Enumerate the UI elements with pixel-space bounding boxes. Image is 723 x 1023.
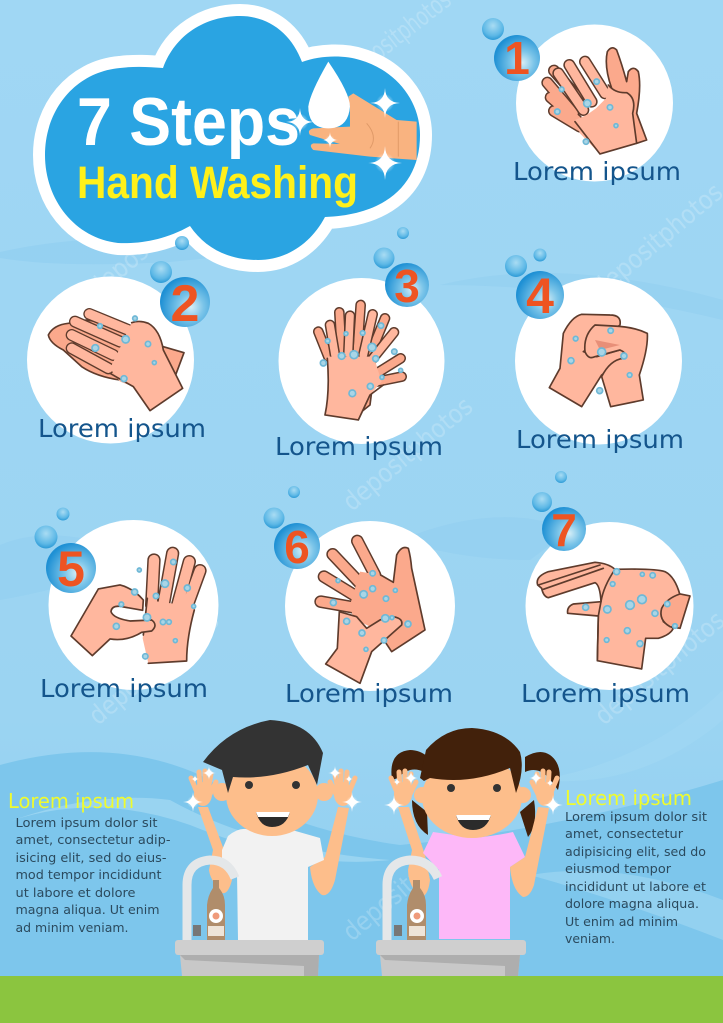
- step circle: [278, 278, 444, 444]
- eyes: [245, 781, 300, 789]
- icon: palm over back of hand: [48, 314, 184, 411]
- hair: [203, 720, 323, 793]
- boy at sink: [175, 720, 362, 976]
- label: Lorem ipsum: [521, 679, 690, 708]
- number: 3: [394, 260, 420, 312]
- ground: [0, 976, 723, 1023]
- number: 2: [171, 275, 199, 333]
- icon: hand under water drop: [308, 62, 417, 160]
- number badge: [494, 35, 540, 81]
- soap bottle: [407, 880, 426, 940]
- body text: ut labore et dolore: [16, 886, 136, 901]
- bubbles: [374, 227, 409, 268]
- body text: Lorem ipsum dolor sit: [16, 816, 158, 831]
- body text: eiusmod tempor: [565, 862, 672, 877]
- bubble: [482, 18, 504, 40]
- step 3: [275, 227, 444, 461]
- sparkles: [183, 766, 362, 812]
- hands: [191, 771, 355, 806]
- number: 7: [551, 504, 577, 556]
- body text: isicing elit, sed do eius-: [16, 851, 166, 866]
- body text: veniam.: [565, 932, 615, 947]
- left text block: [8, 789, 170, 936]
- faucet: [187, 860, 235, 940]
- hands: [391, 771, 557, 806]
- label: Lorem ipsum: [516, 425, 684, 454]
- number: 1: [504, 32, 530, 84]
- girl at sink: [376, 728, 563, 976]
- body text: dolore magna aliqua.: [565, 897, 699, 912]
- step 1: [482, 18, 681, 186]
- bubbles: [34, 508, 70, 548]
- arms: [398, 807, 549, 897]
- shirt: [423, 832, 525, 939]
- number: 4: [526, 268, 554, 324]
- bubbles: [264, 486, 300, 528]
- number badge: [385, 263, 429, 307]
- number badge: [516, 271, 564, 319]
- step circle: [27, 276, 194, 444]
- right text block: [565, 786, 707, 947]
- background waves: [0, 239, 723, 976]
- body text: adipisicing elit, sed do: [565, 845, 706, 860]
- watermark: depositphotos: [83, 606, 225, 731]
- label: Lorem ipsum: [38, 414, 206, 443]
- step circle: [285, 521, 455, 691]
- hair: [420, 728, 522, 793]
- title cloud badge: [45, 16, 420, 260]
- ears and face: [213, 754, 333, 836]
- heading: Lorem ipsum: [565, 786, 692, 810]
- smile: [456, 815, 491, 830]
- watermark: depositphotos: [337, 822, 479, 947]
- body text: magna aliqua. Ut enim: [16, 903, 160, 918]
- icon: fingertips in palm: [321, 541, 425, 683]
- sparkles: [384, 771, 563, 815]
- step 7: [521, 471, 694, 708]
- label: Lorem ipsum: [275, 432, 443, 461]
- eyes: [447, 784, 501, 792]
- cloud shape: [45, 16, 420, 260]
- body text: mod tempor incididunt: [16, 868, 162, 883]
- heading: Lorem ipsum: [8, 789, 134, 813]
- watermark: depositphotos: [337, 392, 479, 517]
- icon: thumb rub: [549, 314, 647, 407]
- arms: [198, 807, 349, 895]
- icon: interlaced fingers: [318, 305, 403, 420]
- icon: rubbing wrist: [537, 562, 690, 669]
- body text: amet, consectetur adip-: [16, 833, 170, 848]
- step circle: [48, 520, 218, 690]
- number badge: [46, 543, 96, 593]
- number badge: [160, 277, 210, 327]
- number: 6: [284, 521, 310, 573]
- step circle: [516, 24, 673, 182]
- step circle: [526, 522, 694, 690]
- title: 7 Steps: 7 Steps: [77, 84, 300, 160]
- step 5: [34, 508, 218, 703]
- shirt: [222, 829, 324, 940]
- subtitle: Hand Washing: Hand Washing: [77, 157, 358, 208]
- label: Lorem ipsum: [513, 157, 681, 186]
- ears and face: [414, 756, 531, 838]
- body text: ad minim veniam.: [16, 921, 128, 936]
- pigtails: [391, 750, 560, 837]
- watermark: depositphotos: [83, 178, 225, 303]
- bubbles: [150, 236, 189, 283]
- sink: [376, 940, 526, 976]
- step 4: [505, 248, 684, 454]
- icon: sparkles: [286, 88, 402, 180]
- bubbles: [532, 471, 567, 512]
- body text: [565, 810, 707, 947]
- number badge: [274, 523, 320, 569]
- step circle: [515, 278, 682, 444]
- number badge: [542, 507, 586, 551]
- faucet: [387, 860, 438, 940]
- soap bottle: [207, 880, 225, 940]
- body text: Ut enim ad minim: [565, 915, 678, 930]
- step 2: [27, 236, 210, 444]
- icon: hands palm to palm: [547, 48, 647, 154]
- body text: incididunt ut labore et: [565, 880, 706, 895]
- label: Lorem ipsum: [285, 679, 453, 708]
- bubbles: [505, 248, 546, 277]
- sink: [175, 940, 324, 976]
- body text: [16, 816, 170, 936]
- smile: [256, 812, 290, 827]
- step 6: [264, 486, 455, 708]
- body text: Lorem ipsum dolor sit: [565, 810, 707, 825]
- label: Lorem ipsum: [40, 674, 208, 703]
- icon: hand gripping thumb of open hand: [71, 553, 200, 663]
- number: 5: [57, 541, 85, 597]
- body text: amet, consectetur: [565, 827, 684, 842]
